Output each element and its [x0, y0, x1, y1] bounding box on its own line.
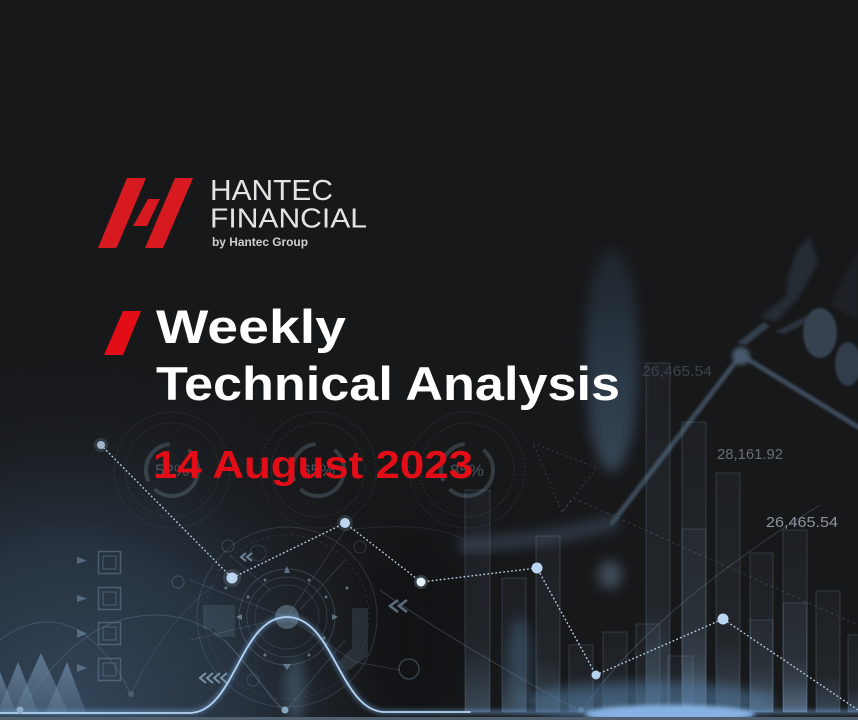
dotted data line with nodes — [94, 438, 858, 710]
mountain chart — [0, 653, 86, 712]
logo wordmark: HANTEC — [210, 175, 333, 207]
floor glow — [0, 658, 858, 720]
logo wordmark: FINANCIAL — [210, 202, 367, 234]
percentage dials: 52% — [155, 461, 189, 480]
percentage dials: 85% — [450, 461, 484, 480]
date: 14 August 2023 — [153, 444, 473, 487]
faint zigzag and curves — [0, 443, 858, 713]
price labels: 26,465.54 — [766, 514, 838, 531]
logo wordmark — [210, 175, 367, 249]
price labels: 26,465.54 — [642, 363, 712, 380]
title: Weekly — [156, 300, 346, 353]
bar chart — [465, 363, 858, 712]
red slash accent — [104, 311, 141, 355]
percentage dials: 65% — [301, 461, 335, 480]
radial gauge — [172, 527, 419, 712]
blurred hand and pen, top right — [585, 237, 858, 472]
thick trend line — [465, 347, 858, 713]
title — [156, 300, 620, 410]
bell curve line — [0, 617, 858, 714]
logo: Hantec Financial — [98, 175, 367, 249]
logo mark — [98, 178, 193, 248]
chevron marks — [200, 553, 407, 683]
checklist squares — [77, 552, 120, 680]
price labels — [642, 363, 838, 531]
title: Technical Analysis — [156, 357, 620, 410]
percentage dials — [114, 412, 525, 528]
logo wordmark: by Hantec Group — [212, 235, 308, 249]
price labels: 28,161.92 — [717, 446, 783, 463]
